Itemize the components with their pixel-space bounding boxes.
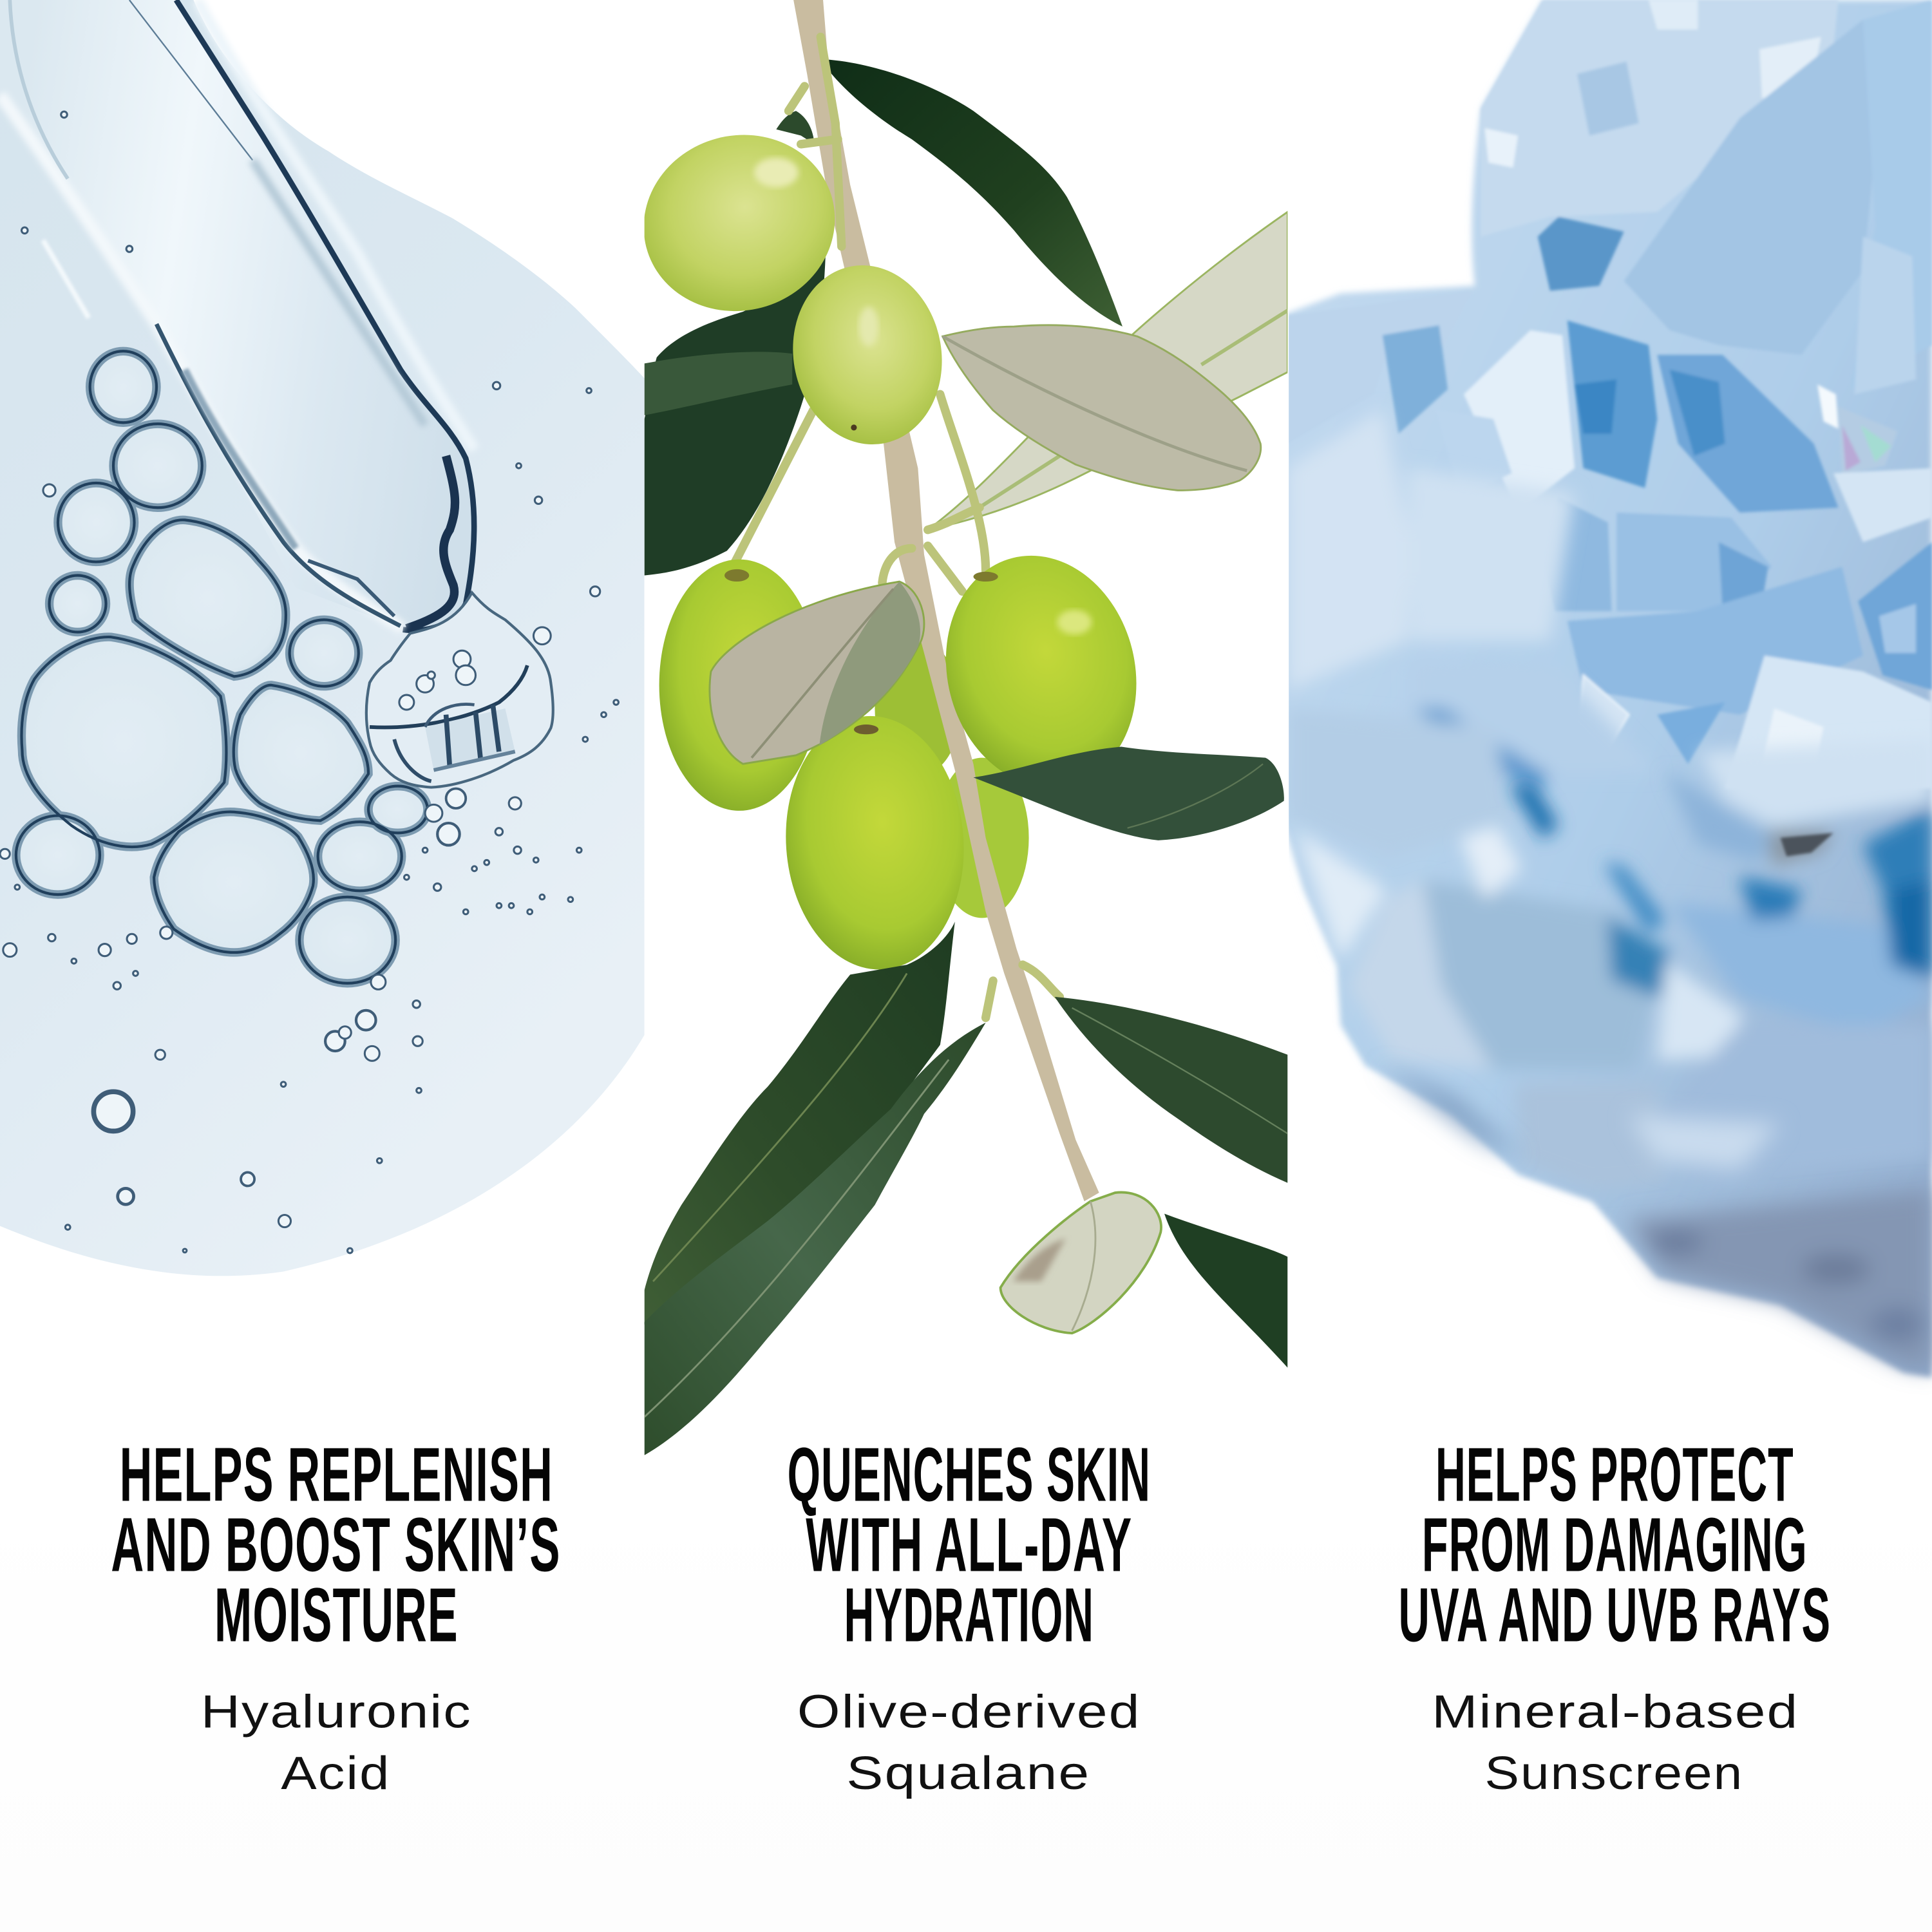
lower leaf upper blade <box>645 922 955 1325</box>
ingredient: mineral-based sunscreen: Mineral-based <box>1432 1685 1799 1738</box>
soft left facets <box>1287 409 1657 858</box>
right dark leaf <box>973 746 1284 840</box>
pale back leaf <box>928 212 1287 530</box>
blurred bottom rock <box>1380 1066 1932 1370</box>
bubbles cluster <box>16 351 428 983</box>
ingredient: hyaluronic acid <box>201 1685 472 1799</box>
ingredient: hyaluronic acid: Acid <box>281 1747 391 1799</box>
heading: helps replenish <box>111 1432 561 1658</box>
column 2 copy <box>788 1432 1151 1799</box>
panel: mineral crystal <box>1282 0 1932 1378</box>
serum pool <box>0 0 645 1276</box>
pipette drop tip <box>366 592 553 788</box>
bottom dark leaf <box>1164 1214 1287 1368</box>
blurred lower facets <box>1296 739 1932 1189</box>
ingredient: mineral-based sunscreen: Sunscreen <box>1484 1747 1743 1799</box>
lower leaf main blade <box>645 1023 986 1455</box>
heading: helps replenish: MOISTURE <box>214 1573 459 1658</box>
top dark leaf <box>820 59 1122 327</box>
small left leaf <box>645 352 792 415</box>
back lower olive <box>935 758 1029 918</box>
back olive <box>875 641 961 776</box>
heading: helps replenish: HELPS REPLENISH <box>120 1432 553 1517</box>
small top leaf <box>776 111 815 144</box>
ingredient: olive-derived squalane: Squalane <box>846 1747 1090 1799</box>
pale curled leaf <box>710 582 924 764</box>
heading: quenches skin: QUENCHES SKIN <box>788 1432 1151 1517</box>
column 1 copy <box>111 1432 561 1799</box>
heading: helps replenish: AND BOOST SKIN’S <box>111 1502 561 1587</box>
ingredient: olive-derived squalane: Olive-derived <box>797 1685 1141 1738</box>
heading: helps protect <box>1399 1432 1831 1658</box>
pale bottom leaf <box>1001 1192 1161 1333</box>
ingredient: hyaluronic acid: Hyaluronic <box>201 1685 472 1738</box>
glass pipette <box>0 0 475 630</box>
column 3 copy <box>1399 1432 1831 1799</box>
ingredient: mineral-based sunscreen <box>1432 1685 1799 1799</box>
mineral dark speck <box>1781 833 1833 857</box>
crystal silhouette <box>1282 0 1932 1378</box>
small air bubbles <box>0 111 618 1253</box>
heading: quenches skin <box>788 1432 1151 1658</box>
grey-green leaf <box>943 325 1261 490</box>
heading: quenches skin: WITH ALL-DAY <box>806 1502 1132 1587</box>
heading: quenches skin: HYDRATION <box>844 1573 1094 1658</box>
panel: hyaluronic acid serum <box>0 0 645 1276</box>
dark left leaf <box>645 255 826 575</box>
sharp upper facets <box>1287 0 1932 788</box>
pedicels <box>728 37 1059 1018</box>
ingredient: olive-derived squalane <box>797 1685 1141 1799</box>
panel: olive branch <box>624 0 1287 1455</box>
olives <box>624 113 1160 976</box>
right lower leaf <box>1055 997 1287 1183</box>
main stem <box>793 0 1099 1201</box>
